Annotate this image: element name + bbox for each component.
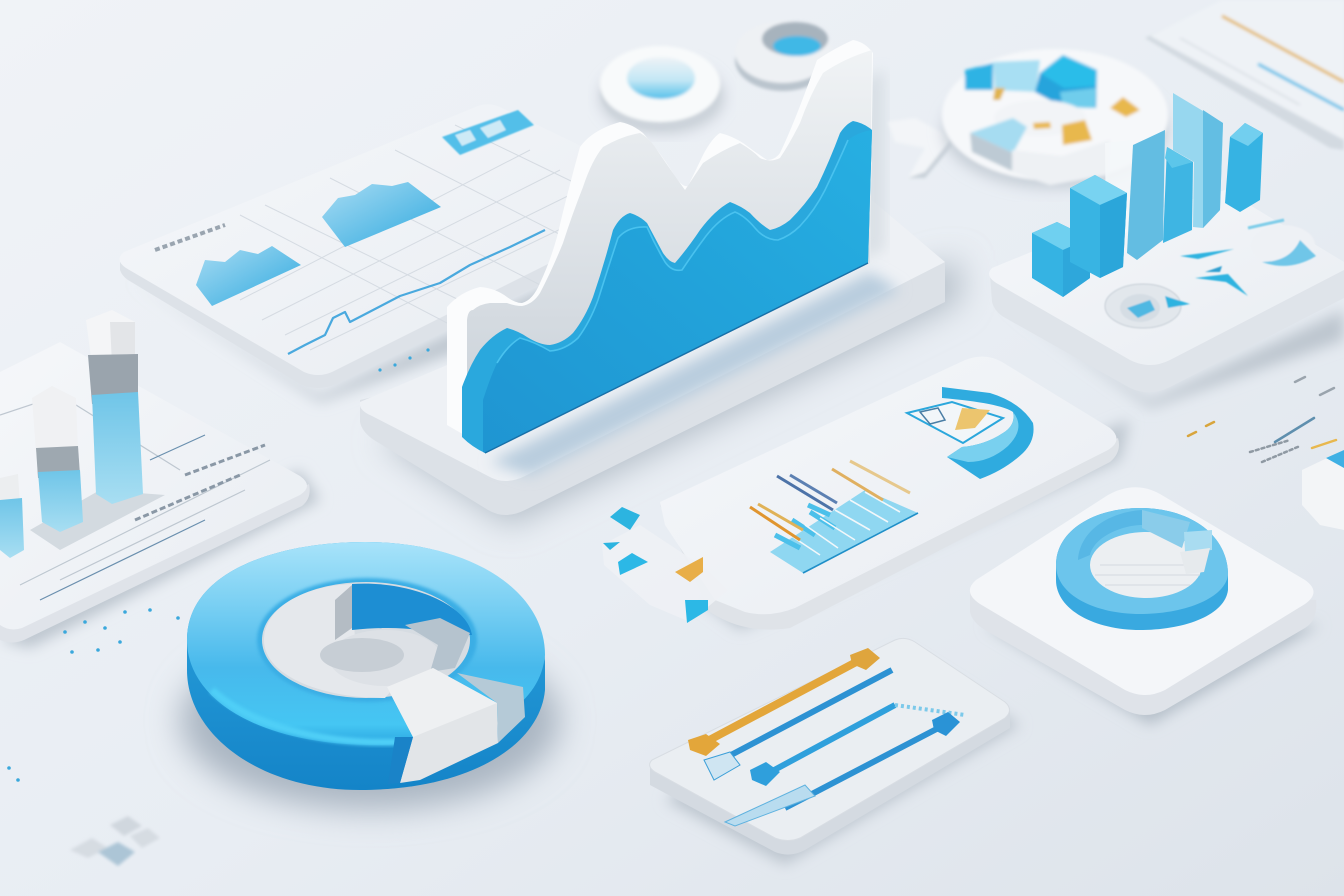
icon: small ring top centre <box>735 21 831 91</box>
panel: top right document card <box>1145 0 1344 150</box>
legend dashes <box>155 225 225 250</box>
icon: bottom left floating tiles <box>70 816 160 866</box>
icon: big donut <box>180 542 560 810</box>
mini area chart left <box>196 246 301 306</box>
panel: top right donut with cubes <box>942 49 1168 188</box>
panel: right square plate with ring <box>970 487 1320 725</box>
blue front wave bevel <box>462 121 872 453</box>
bar: mid cube <box>1163 147 1193 243</box>
text dashes <box>1188 377 1336 462</box>
panel: central wave chart <box>447 40 873 453</box>
icon: small ring top centre-left <box>600 46 724 133</box>
slider: gold <box>688 648 880 756</box>
line chart <box>288 230 545 354</box>
panel: right edge fragments <box>1188 377 1344 530</box>
bar: medium <box>32 386 83 532</box>
panel: slider card <box>650 638 1020 865</box>
panel: central wave shadow and plate <box>360 70 960 525</box>
gauge <box>907 387 1034 479</box>
mini area chart right <box>322 182 441 247</box>
panel: left card with bars <box>0 310 320 648</box>
decoration: scattered dots <box>7 348 430 782</box>
white wave front face <box>467 50 872 450</box>
blue wave highlight edge <box>497 140 848 363</box>
bar: tall <box>86 310 143 504</box>
icon: small white object beside wave <box>888 118 952 178</box>
badge <box>442 110 534 155</box>
blue front wave face <box>483 130 872 453</box>
bar chart <box>750 461 918 573</box>
blue wave bottom edge <box>485 263 868 453</box>
bar shadow plinth <box>30 490 165 550</box>
slider: blue 2 <box>750 705 965 786</box>
grid lines <box>240 125 600 350</box>
bar: tall glass <box>1173 93 1223 228</box>
white back wave <box>447 40 873 450</box>
panel: top right plate with bars <box>989 93 1344 408</box>
floating cubes <box>602 507 728 623</box>
panel: centre right card <box>602 356 1130 630</box>
icon: ring <box>1056 508 1228 630</box>
inner hole <box>257 578 477 702</box>
bar: glass bar <box>1127 130 1165 260</box>
panel: top left chart card <box>119 104 600 402</box>
chart lines <box>0 395 270 600</box>
bar: white glass backing <box>1105 140 1134 240</box>
bar: cube 2 <box>1070 175 1127 278</box>
white segment <box>387 668 525 784</box>
slider: blue 1 <box>704 670 892 780</box>
bar: cube 1 <box>1032 222 1090 297</box>
slider: blue 3 <box>725 712 960 826</box>
bar: right cube <box>1225 123 1263 212</box>
bar: short <box>0 474 24 558</box>
icon: plate gauge <box>1105 220 1316 328</box>
